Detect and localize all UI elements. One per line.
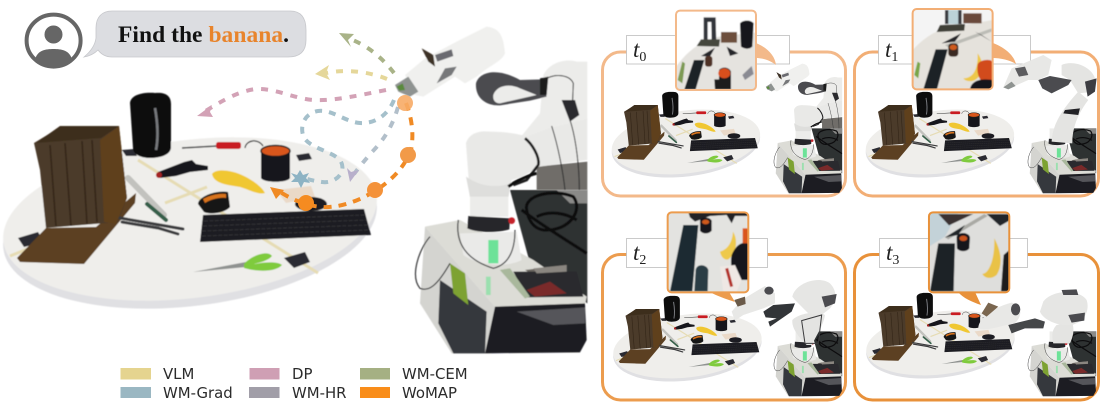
trajectory: WM-Grad xyxy=(291,100,394,188)
label t1 xyxy=(878,36,1030,65)
label t2: 2 xyxy=(639,253,646,268)
label t3: 3 xyxy=(892,253,899,268)
screwdriver xyxy=(182,141,263,149)
callout tail t3 xyxy=(958,292,981,305)
arm t3 xyxy=(978,289,1088,343)
legend: WM-CEM xyxy=(402,365,468,383)
banana xyxy=(212,170,265,193)
speech bubble xyxy=(84,11,306,57)
panel: t0 xyxy=(602,11,846,196)
camera view t0 xyxy=(676,11,756,90)
black jar xyxy=(130,93,171,158)
camera view t3 xyxy=(929,212,1009,292)
avatar icon xyxy=(27,15,81,67)
trajectory: WM-HR xyxy=(347,107,398,182)
speech bubble: Find the banana. xyxy=(118,22,289,48)
label t3 xyxy=(880,238,1028,268)
callout tail t2 xyxy=(710,292,735,302)
legend: WM-HR xyxy=(292,384,346,402)
trajectory: VLM xyxy=(315,65,387,80)
paper card xyxy=(276,186,315,203)
legend: WM-Grad xyxy=(163,384,233,402)
robot arm xyxy=(395,27,587,197)
arm t1 xyxy=(1003,55,1097,143)
label t2: t xyxy=(633,240,639,265)
scissors xyxy=(193,253,282,272)
fiducial tags xyxy=(18,149,312,268)
trajectory: WM-CEM xyxy=(339,33,394,73)
scene t3 xyxy=(862,289,1096,396)
scene t2 xyxy=(609,280,842,396)
scene t1 xyxy=(862,55,1097,193)
legend: DP xyxy=(292,365,312,383)
callout tail t1 xyxy=(993,43,1016,64)
keyboard xyxy=(200,209,371,242)
table top xyxy=(0,118,386,328)
robot base and shoulder xyxy=(416,190,587,353)
scene t0 xyxy=(608,64,842,193)
camera view t1 xyxy=(913,9,993,89)
wooden box xyxy=(17,126,136,264)
black mug xyxy=(261,146,290,182)
trajectory: DP xyxy=(197,89,386,117)
legend: WoMAP xyxy=(402,384,457,402)
legend: VLM xyxy=(163,365,194,383)
arm t2 xyxy=(732,280,837,345)
callout tail t0 xyxy=(756,43,776,65)
label t0 xyxy=(626,36,790,65)
label t2 xyxy=(626,238,768,268)
label t0: t xyxy=(633,37,639,62)
camera view t2 xyxy=(668,212,748,292)
label t0: 0 xyxy=(639,50,646,65)
label t1: t xyxy=(885,37,891,62)
ruler and pliers xyxy=(120,178,183,234)
panel: t2 xyxy=(602,212,846,400)
label t3: t xyxy=(886,240,892,265)
legend xyxy=(120,365,468,402)
label t1: 1 xyxy=(891,50,898,65)
panel: t1 xyxy=(854,9,1098,196)
table scene with objects xyxy=(0,93,386,328)
mouse xyxy=(295,197,327,211)
tape measure xyxy=(198,192,230,213)
clamp xyxy=(156,160,208,178)
panel: t3 xyxy=(854,212,1098,400)
trajectory: WoMAP xyxy=(270,95,416,211)
